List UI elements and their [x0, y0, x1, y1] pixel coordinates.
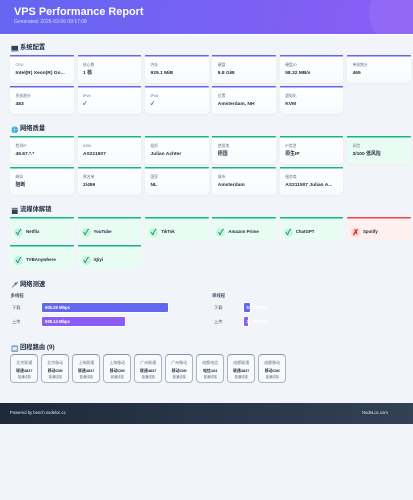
card: test IP: 检测IP: [16, 144, 27, 148]
card: multi core score: [10, 86, 74, 114]
card: TikTok: [145, 217, 209, 241]
route: Chengdu Mobile: [258, 354, 286, 383]
card: TVBAnywhere: [10, 245, 74, 269]
route: Chengdu Unicom: 联通4837: [233, 368, 249, 372]
route: Guangzhou Mobile: [165, 354, 193, 383]
heading: system config: 系统配置: [20, 44, 45, 51]
generated time: Generated: 2026-03-06 09:17:08: [14, 19, 87, 25]
card: single core score: 465: [352, 70, 361, 76]
route: Guangzhou Mobile: 广州移动: [171, 360, 187, 365]
card: Spotify: [347, 217, 411, 241]
route: Guangzhou Unicom: 广州联通: [140, 360, 156, 365]
card: organization: [145, 136, 209, 164]
card: Netflix: Netflix: [26, 229, 39, 234]
card: IPv6: [145, 86, 209, 114]
card: usage location: 德国: [218, 152, 228, 156]
icon: clapperboard: [12, 208, 18, 214]
card: risk: 风险: [352, 144, 360, 148]
card: virtualization: KVM: [285, 102, 296, 106]
card: ip type: 原生IP: [285, 152, 300, 156]
card: risk: 3/100 低风险: [352, 152, 381, 156]
route: Chengdu Unicom: 普通线路: [235, 374, 248, 378]
route: Chengdu Telecom: 普通线路: [204, 374, 217, 378]
heading: route trace: 回程路由 (9): [20, 344, 55, 351]
icon: monitor: [11, 46, 18, 52]
route: Guangzhou Mobile: 移动CMI: [172, 368, 187, 372]
card: usage location: 使用地: [218, 144, 229, 148]
header banner: [0, 0, 413, 35]
bar: upload: [41, 316, 126, 327]
card: Amazon Prime: Amazon Prime: [228, 229, 259, 234]
route: Guangzhou Unicom: 联通4837: [140, 368, 156, 372]
card: provider: [280, 167, 343, 195]
decorative circle: [369, 0, 413, 48]
label: single thread: 单线程: [212, 293, 225, 298]
title: VPS Performance Report: [14, 6, 144, 18]
route: Beijing Unicom: [10, 354, 38, 383]
card: disk: [212, 55, 276, 83]
route: Beijing Unicom: 北京联通: [16, 360, 32, 365]
card: organization: 组织: [150, 144, 158, 148]
panel: system config: [10, 55, 411, 110]
icon: rocket: [12, 281, 18, 288]
bar: download: [41, 302, 168, 313]
card: Spotify: ✗: [352, 228, 359, 236]
card: blacklist: 2/459: [83, 182, 95, 188]
card: IPv6: IPv6: [150, 94, 158, 98]
panel: multi thread speed: [10, 292, 169, 327]
card: TikTok: ✓: [151, 228, 157, 236]
route: Beijing Unicom: 联通4837: [16, 368, 33, 372]
card: IPv6: ✓: [150, 102, 154, 106]
card: single core score: [347, 55, 411, 83]
bar: upload: 598.14 Mbps: [45, 319, 70, 324]
card: multi core score: 多核跑分: [16, 94, 31, 98]
heading: streaming unlock: 流媒体解锁: [20, 206, 51, 213]
panel: network quality: [10, 136, 411, 190]
card: mail: 阻断: [16, 182, 25, 188]
card: Amazon Prime: [212, 217, 276, 241]
card: iQiyi: [78, 245, 141, 269]
route: Beijing Unicom: 普通线路: [18, 374, 31, 378]
card: YouTube: ✓: [83, 228, 89, 236]
card: IPv4: IPv4: [83, 94, 91, 98]
card: YouTube: YouTube: [94, 229, 112, 234]
card: disk: 9.8 GiB: [218, 70, 235, 76]
route: Chengdu Telecom: [196, 354, 224, 383]
card: Amazon Prime: ✓: [218, 228, 224, 236]
card: CPU: Intel(R) Xeon(R) Go...: [16, 70, 65, 76]
label: multi thread: 多线程: [10, 293, 24, 298]
panel: single thread speed: 31.68 Mbps: [246, 319, 269, 324]
bar: download: 905.28 Mbps: [45, 305, 70, 310]
footer site: NodeLoc.com: [362, 410, 388, 415]
card: city: 城市: [218, 174, 225, 178]
route: Beijing Mobile: 普通线路: [49, 374, 62, 378]
card: organization: Julian Achter: [150, 152, 181, 156]
card: Spotify: Spotify: [363, 229, 378, 234]
card: memory: [145, 55, 209, 83]
card: ASN: [78, 136, 141, 164]
route: Chengdu Unicom: [227, 354, 255, 383]
route: Guangzhou Unicom: [134, 354, 162, 383]
card: usage location: [212, 136, 276, 164]
footer: [0, 403, 413, 424]
card: country: 国家: [150, 174, 158, 178]
route: Shanghai Mobile: [103, 354, 131, 383]
bar: upload: [242, 316, 248, 327]
card: mail: 邮局: [16, 174, 23, 178]
heading: network speed: 网络测速: [20, 281, 45, 288]
panel: single thread speed: 51.65 Mbps: [246, 305, 269, 310]
bar: download: [242, 302, 250, 313]
heading: network quality: 网络质量: [20, 125, 45, 132]
card: ASN: ASN: [83, 144, 91, 148]
card: ip type: IP类型: [285, 144, 296, 148]
card: cores: [78, 55, 141, 83]
card: virtualization: 虚拟化: [285, 94, 297, 98]
route: Chengdu Unicom: 成都联通: [233, 360, 249, 365]
route: Beijing Mobile: 移动CMI: [48, 368, 63, 372]
route: Chengdu Mobile: 普通线路: [266, 374, 279, 378]
card: ASN: AS211507: [83, 152, 106, 156]
card: blacklist: 黑名单: [83, 174, 94, 178]
route: Guangzhou Mobile: 普通线路: [173, 374, 186, 378]
card: disk io: 58.32 MB/s: [285, 70, 310, 76]
card: disk io: [280, 55, 343, 83]
route: Chengdu Telecom: 成都电信: [202, 360, 218, 365]
label: upload: 上传: [214, 319, 222, 324]
card: single core score: 单核跑分: [352, 62, 368, 66]
card: country: [145, 167, 209, 195]
card: mail: [10, 167, 74, 195]
card: iQiyi: ✓: [83, 256, 89, 264]
card: TVBAnywhere: TVBAnywhere: [26, 257, 56, 262]
route: Shanghai Unicom: [72, 354, 100, 383]
card: IPv4: ✓: [83, 102, 87, 106]
card: city: Amsterdam: [218, 182, 245, 188]
card: memory: 929.1 MiB: [150, 70, 173, 76]
label: download: 下载: [12, 305, 20, 310]
card: cores: 1 核: [83, 70, 92, 76]
route: Beijing Mobile: 北京移动: [47, 360, 63, 365]
card: TikTok: TikTok: [161, 229, 175, 234]
card: memory: 内存: [150, 62, 158, 66]
card: location: 位置: [218, 94, 225, 98]
card: disk io: 硬盘IO: [285, 62, 297, 66]
card: test IP: [10, 136, 74, 164]
card: country: NL: [150, 182, 157, 188]
route: Shanghai Unicom: 联通4837: [78, 368, 94, 372]
card: ChatGPT: [280, 217, 343, 241]
card: TVBAnywhere: ✓: [16, 256, 22, 264]
route: Shanghai Mobile: 移动CMI: [110, 368, 125, 372]
route: Beijing Mobile: [41, 354, 69, 383]
card: cores: 核心数: [83, 62, 94, 66]
card: disk: 硬盘: [218, 62, 225, 66]
card: CPU: CPU: [16, 62, 24, 66]
card: provider: 服务商: [285, 174, 297, 178]
panel: single thread speed: [212, 292, 269, 327]
card: provider: AS211507 Julian A...: [285, 182, 332, 188]
route: Chengdu Mobile: 移动CMI: [265, 368, 280, 372]
card: CPU: [10, 55, 74, 83]
card: Netflix: [10, 217, 74, 241]
card: IPv4: [78, 86, 141, 114]
label: download: 下载: [214, 305, 222, 310]
card: location: Amsterdam, NH: [218, 102, 254, 106]
icon: globe: [11, 126, 18, 133]
card: ChatGPT: ChatGPT: [296, 229, 314, 234]
card: ip type: [280, 136, 343, 164]
card: blacklist: [78, 167, 141, 195]
icon: route: [11, 345, 18, 352]
card: test IP: 45.67.*.*: [16, 152, 34, 156]
label: upload: 上传: [12, 319, 20, 324]
card: location: [212, 86, 276, 114]
panel: streaming unlock: [10, 217, 411, 265]
route: Shanghai Unicom: 上海联通: [78, 360, 94, 365]
route: Chengdu Mobile: 成都移动: [264, 360, 280, 365]
card: multi core score: 483: [16, 102, 24, 106]
route: Shanghai Mobile: 上海移动: [109, 360, 125, 365]
footer credit: Powered by bench.nodeloc.cc: [10, 410, 66, 415]
card: ChatGPT: ✓: [285, 228, 291, 236]
card: Netflix: ✓: [16, 228, 22, 236]
card: YouTube: [78, 217, 141, 241]
route: Guangzhou Unicom: 普通线路: [142, 374, 155, 378]
route: Shanghai Mobile: 普通线路: [111, 374, 124, 378]
route: Chengdu Telecom: 电信163: [203, 368, 217, 372]
route: Shanghai Unicom: 普通线路: [80, 374, 93, 378]
card: virtualization: [280, 86, 343, 114]
card: risk: [347, 136, 411, 164]
panel: route cards: [10, 354, 286, 383]
card: city: [212, 167, 276, 195]
card: iQiyi: iQiyi: [94, 257, 103, 262]
